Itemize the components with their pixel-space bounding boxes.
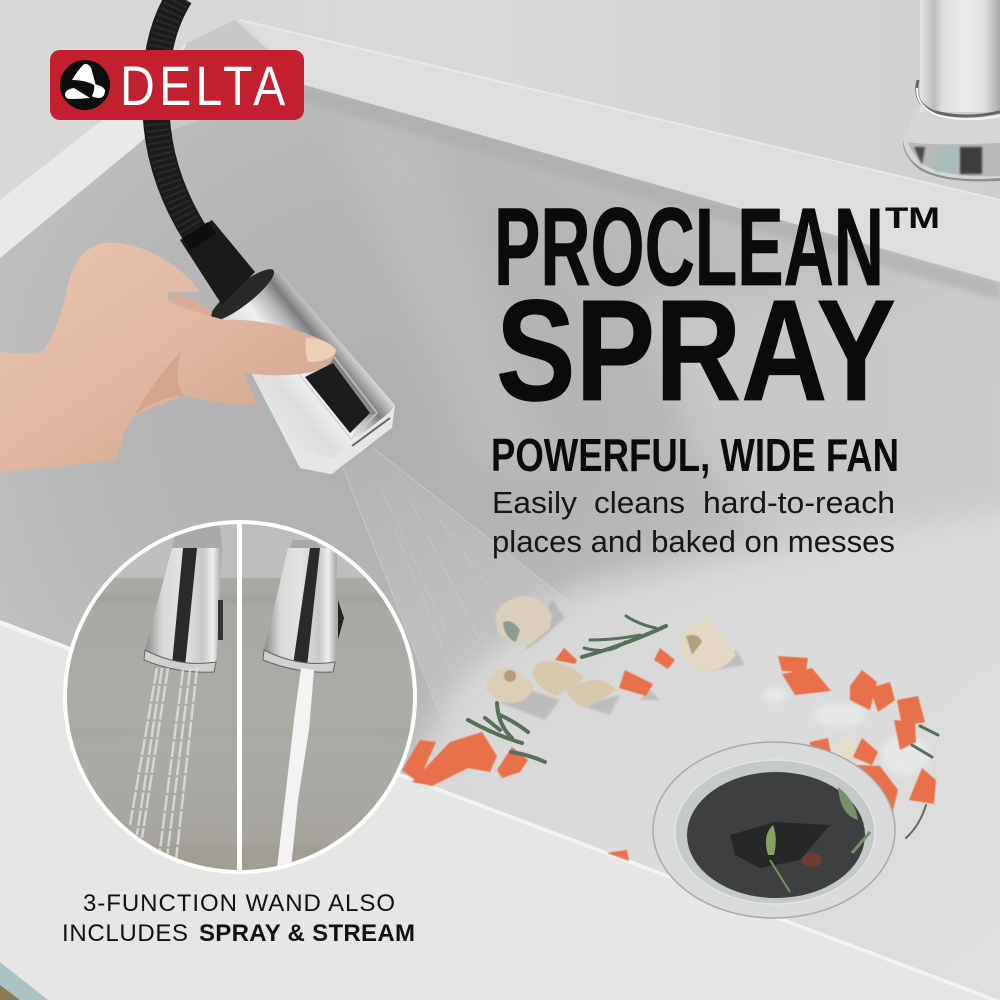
hand holding wand [0,243,336,472]
subheading: POWERFUL, WIDE FAN [491,429,899,481]
countertop front ledge [0,620,1000,1000]
description: places and baked on messes [492,524,895,559]
description: cleans [594,485,685,520]
caption [62,890,415,947]
description: Easily [492,485,578,520]
mushroom pieces [487,596,856,774]
water droplets [763,687,929,775]
hose [156,0,196,235]
logo wordmark: DELTA [120,56,290,118]
stream water [277,668,314,868]
divider [237,522,242,872]
faucet base [903,0,1000,182]
inset circle showing spray and stream [60,520,420,885]
caption: 3-FUNCTION WAND ALSO [83,890,395,917]
caption: SPRAY & STREAM [199,920,415,947]
food scraps and splashes [402,596,938,861]
logo [50,50,304,120]
title: SPRAY [496,270,896,431]
herb sprigs [468,616,938,838]
description [492,485,895,559]
food shadows [500,600,745,720]
description: hard-to-reach [703,485,895,520]
spray setting head [144,525,223,672]
logo mark [60,60,110,110]
drain [653,742,895,918]
carrot pieces [402,648,936,861]
stream setting head [263,540,344,672]
spray fan [343,447,570,728]
spray water [130,668,197,860]
caption: INCLUDES [62,920,188,947]
pull-down spray wand [180,220,395,474]
title: TM [885,202,940,235]
title [494,186,940,431]
